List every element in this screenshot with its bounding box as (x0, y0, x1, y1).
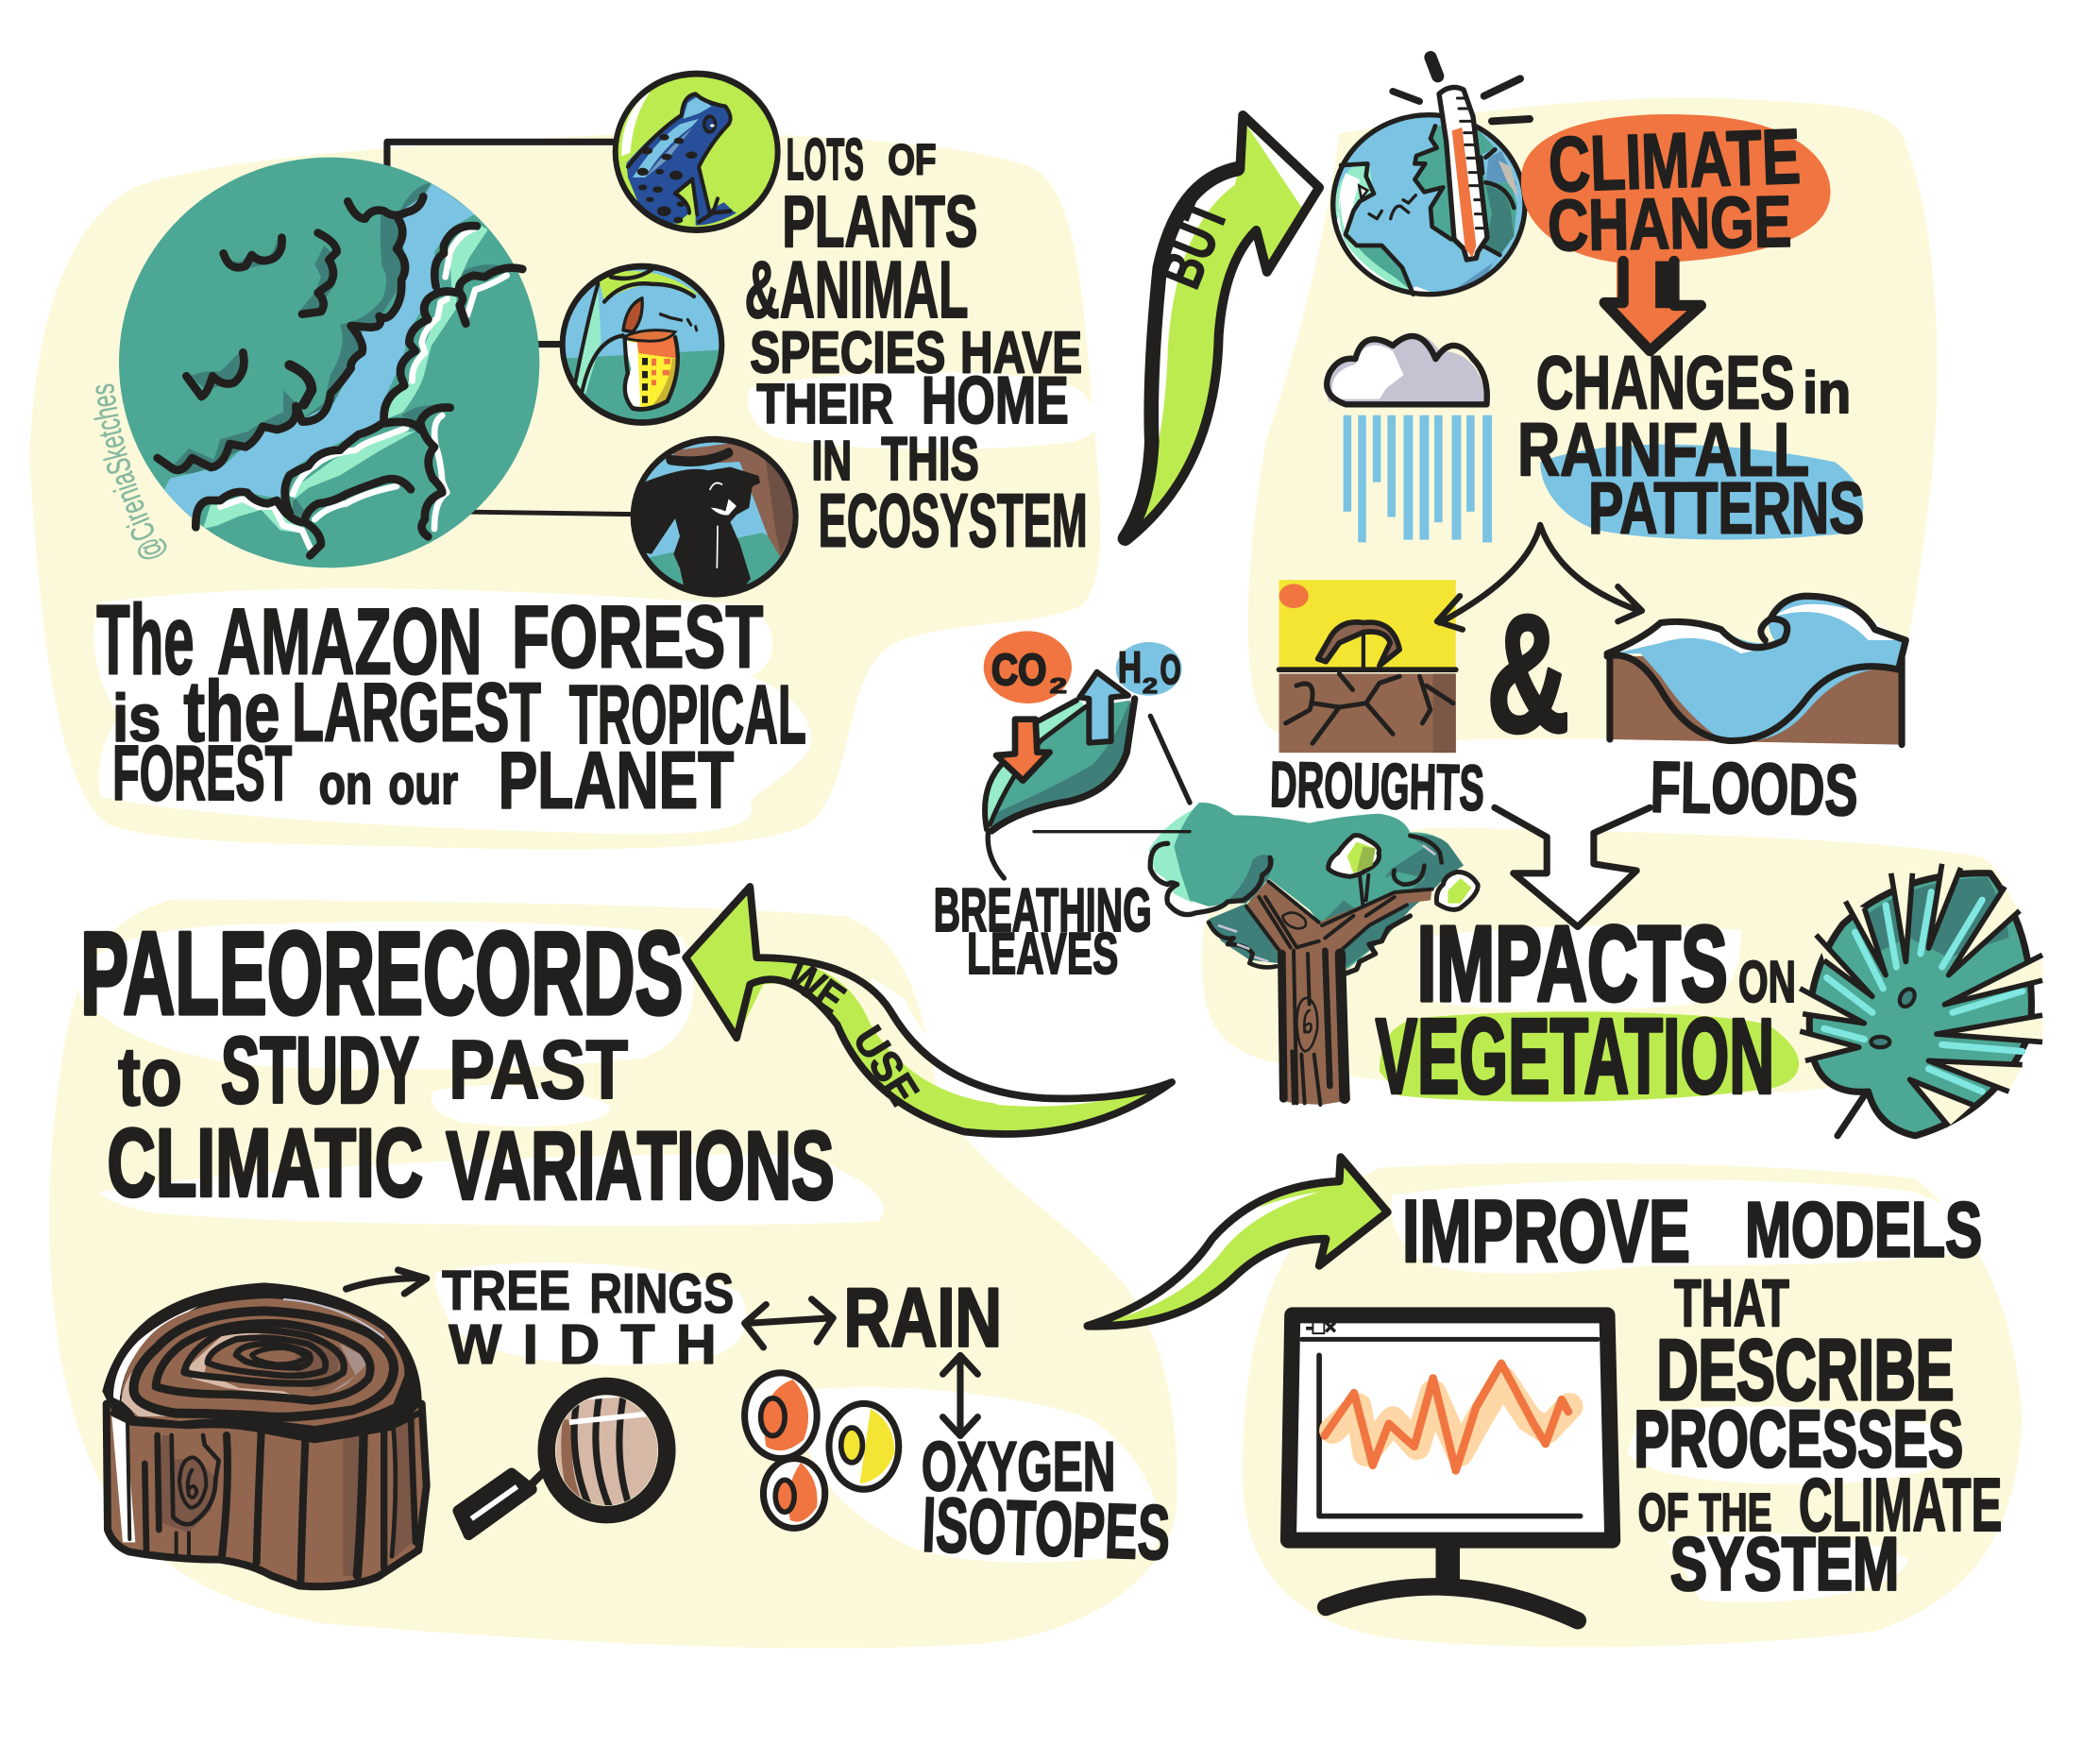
icon: pitcher plant (560, 266, 724, 426)
heading: impacts on vegetation (1376, 905, 1799, 1116)
icon: monkey (633, 439, 805, 601)
heading: improve models that describe processes of the climate system: MODELS (1745, 1187, 1982, 1273)
panel: climate change background (1248, 97, 1938, 745)
heading: the Amazon forest is the largest tropical forest: AMAZON (217, 589, 483, 694)
callout: climate change: CHANGE (1547, 182, 1792, 266)
text: ampersand: & (1486, 580, 1569, 767)
text: species statement: PLANTS (782, 182, 977, 263)
icon: monstera leaf (1800, 864, 2042, 1136)
heading: the Amazon forest is the largest tropical forest: the (183, 664, 279, 759)
heading: the Amazon forest is the largest tropical forest: is (112, 681, 161, 755)
text: species statement: IN (812, 429, 852, 492)
icon: breathing leaf with CO2 and H2O (984, 631, 1190, 878)
arrow: climate to rainfall (1601, 262, 1706, 351)
arrows: rainfall splits to droughts and floods (1437, 525, 1642, 630)
heading: improve models that describe processes of the climate system: DESCRIBE (1657, 1323, 1954, 1418)
icon: computer monitor with climate chart (1288, 1315, 1613, 1620)
heading: the Amazon forest is the largest tropical forest: LARGEST (292, 665, 541, 758)
icon: rain cloud (1327, 334, 1492, 542)
heading: the Amazon forest is the largest tropical forest: PLANET (499, 736, 734, 825)
heading: impacts on vegetation: ON (1738, 950, 1796, 1015)
arrow: we use: USE (844, 1018, 928, 1113)
heading: paleorecords: CLIMATIC (107, 1110, 423, 1217)
text: breathing leaves: LEAVES (967, 922, 1118, 987)
text: tree rings width (442, 1259, 734, 1376)
text: changes in rainfall patterns: PATTERNS (1588, 469, 1864, 550)
text: rain and oxygen isotopes (844, 1270, 1172, 1577)
heading: improve models that describe processes of the climate system (1402, 1181, 2002, 1606)
white highlights behind text (78, 372, 1988, 1602)
heading: improve models that describe processes of the climate system: IMPROVE (1402, 1181, 1690, 1280)
heading: impacts on vegetation: IMPACTS (1417, 905, 1728, 1025)
arrow: droughts and floods lead to impacts (1495, 807, 1650, 927)
icon: blue poison frog (616, 74, 778, 230)
icon: oxygen isotopes (745, 1373, 899, 1528)
heading: paleorecords (80, 908, 835, 1219)
text: tree rings width: WIDTH (449, 1313, 717, 1376)
arrow: improve models (1088, 1157, 1387, 1326)
text: tree rings width: TREE (442, 1259, 570, 1322)
text: species statement: SPECIES (750, 320, 945, 385)
heading: the Amazon forest is the largest tropical forest: on (319, 753, 372, 816)
icon: rainforest tree (1149, 803, 1478, 1105)
heading: improve models that describe processes of the climate system: OF THE (1638, 1483, 1771, 1543)
text: tree rings width: RINGS (589, 1262, 734, 1325)
heading: the Amazon forest is the largest tropical forest: The (96, 584, 195, 695)
callout: climate change (1521, 114, 1830, 266)
text: species statement: OF (888, 135, 936, 183)
text: changes in rainfall patterns (1517, 341, 1864, 550)
text: species statement: ECOSYSTEM (819, 479, 1088, 563)
text: species statement: HAVE (960, 320, 1082, 385)
text: species statement: THIS (881, 424, 979, 493)
heading: paleorecords: to (118, 1029, 182, 1123)
text: species statement: HOME (922, 364, 1069, 438)
text: rain and oxygen isotopes: RAIN (844, 1270, 1002, 1364)
panel: models background (1243, 1163, 2023, 1647)
arrow: we use: WE (778, 950, 854, 1024)
text: changes in rainfall patterns: RAINFALL (1517, 408, 1809, 492)
icon: breathing leaf with CO2 and H2O: 2 (1143, 673, 1158, 698)
icon: computer monitor with climate chart: -□× (1306, 1316, 1336, 1339)
text: rain and oxygen isotopes: OXYGEN (922, 1428, 1115, 1506)
heading: the Amazon forest is the largest tropical forest: our (388, 753, 458, 816)
heading: the Amazon forest is the largest tropical forest: TROPICAL (569, 668, 806, 761)
river bank lines (220, 229, 507, 548)
text: species statement (745, 127, 1088, 563)
arrow: BUT (1125, 115, 1319, 540)
text: species statement: LOTS (787, 127, 864, 193)
text: changes in rainfall patterns: CHANGES (1536, 341, 1795, 425)
heading: the Amazon forest is the largest tropical forest: FOREST (112, 731, 292, 817)
text: breathing leaves: BREATHING (934, 875, 1152, 944)
text: species statement: THEIR (756, 372, 893, 435)
panel: vegetation background (1202, 828, 2007, 1095)
heading: paleorecords: PAST (449, 1023, 628, 1116)
icon: breathing leaf with CO2 and H2O: H (1118, 643, 1142, 692)
heading: paleorecords: VARIATIONS (446, 1111, 835, 1219)
heading: improve models that describe processes of the climate system: SYSTEM (1670, 1522, 1899, 1606)
arrow: BUT: BUT (1148, 191, 1242, 296)
arrow: we use (686, 887, 1172, 1134)
icon: tree stump (102, 1270, 427, 1587)
icon: breathing leaf with CO2 and H2O: O (1160, 648, 1181, 693)
text: droughts and floods labels (1269, 748, 1858, 831)
heading: paleorecords: STUDY (221, 1018, 419, 1123)
text: changes in rainfall patterns: in (1803, 361, 1851, 426)
callout: climate change: CLIMATE (1548, 114, 1802, 209)
icon: Amazon river globe (119, 158, 539, 568)
heading: improve models that describe processes of the climate system: THAT (1674, 1266, 1789, 1341)
arrows: proxies relationships (745, 1299, 977, 1435)
heading: the Amazon forest is the largest tropical forest: FOREST (512, 586, 763, 686)
text: breathing leaves (934, 875, 1152, 987)
icon: breathing leaf with CO2 and H2O: 2 (1050, 673, 1067, 698)
icon: breathing leaf with CO2 and H2O: CO (991, 645, 1046, 694)
icon: drought (1279, 580, 1456, 753)
text: watermark: @CireniaSketches (93, 383, 166, 559)
heading: paleorecords: PALEORECORDS (80, 908, 683, 1040)
icon: warming earth with thermometer (1333, 58, 1530, 297)
connector lines from globe to species circles (387, 142, 635, 515)
icon: flood wave (1607, 596, 1905, 745)
heading: impacts on vegetation: VEGETATION (1376, 996, 1774, 1116)
icon: magnifying glass (458, 1386, 667, 1534)
panel: Amazon background (29, 133, 1100, 850)
heading: the Amazon forest is the largest tropical forest (96, 584, 806, 825)
text: droughts and floods labels: DROUGHTS (1269, 749, 1485, 824)
panel: paleorecords background (49, 900, 1177, 1649)
text: droughts and floods labels: FLOODS (1650, 748, 1858, 831)
text: rain and oxygen isotopes: ISOTOPES (921, 1482, 1172, 1577)
text: species statement: &ANIMAL (745, 246, 968, 335)
